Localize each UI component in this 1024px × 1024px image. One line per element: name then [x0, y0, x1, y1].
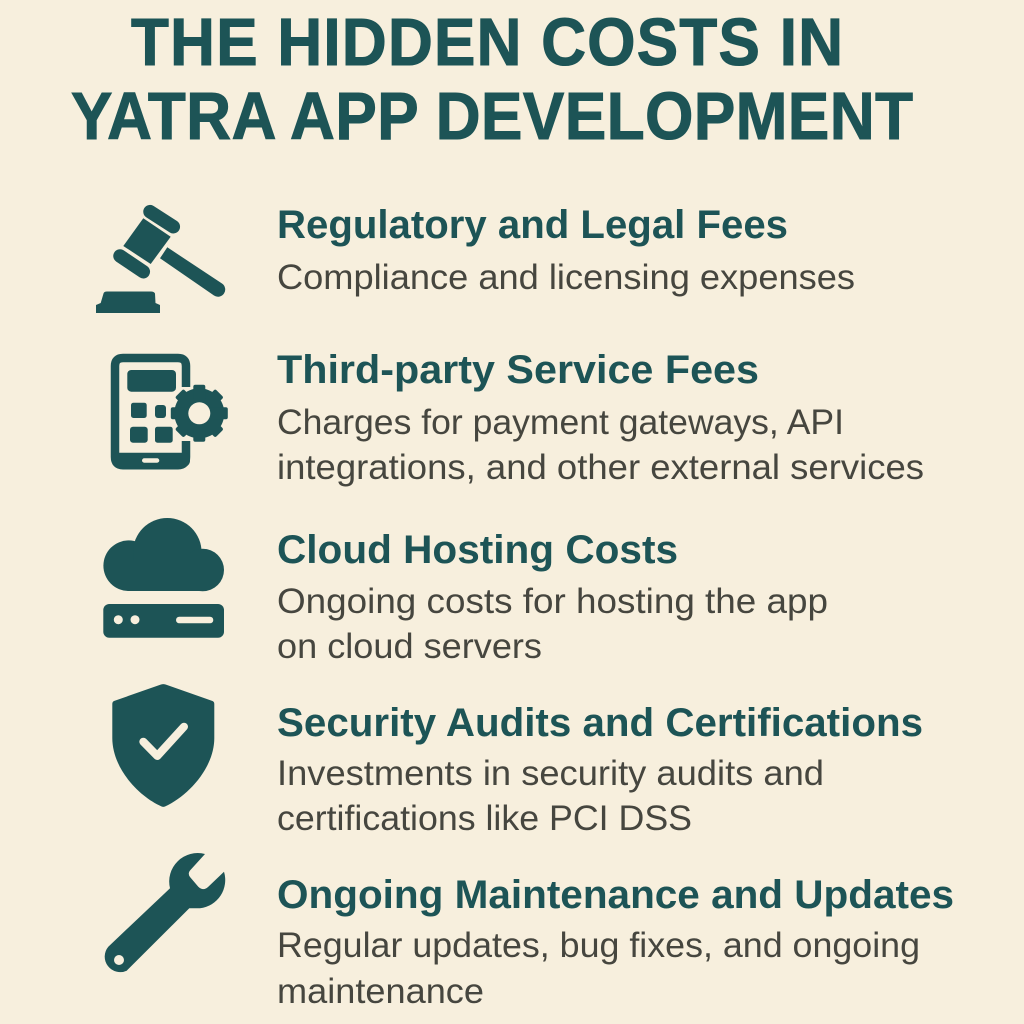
- description: certifications like PCI DSS: [277, 799, 692, 838]
- description: integrations, and other external services: [277, 448, 924, 487]
- description: Compliance and licensing expenses: [277, 258, 855, 297]
- icon: cloud and server: [103, 518, 224, 638]
- panel: third-party service fees: [112, 348, 924, 487]
- panel: ongoing maintenance and updates: [105, 853, 954, 1011]
- description: [277, 926, 920, 1011]
- heading: Third-party Service Fees: [277, 348, 759, 392]
- title: THE HIDDEN COSTS IN: [131, 5, 843, 80]
- description: Ongoing costs for hosting the app: [277, 582, 828, 621]
- icon: gavel: [96, 212, 225, 313]
- description: maintenance: [277, 972, 484, 1011]
- icon: phone calculator with gear: [112, 358, 228, 467]
- description: Investments in security audits and: [277, 754, 824, 793]
- title: YATRA APP DEVELOPMENT: [71, 79, 913, 154]
- heading: Ongoing Maintenance and Updates: [277, 873, 954, 917]
- heading: Cloud Hosting Costs: [277, 528, 678, 572]
- description: [277, 582, 828, 666]
- panel: cloud hosting costs: [103, 518, 828, 666]
- icon: wrench: [105, 853, 225, 972]
- description: [277, 754, 824, 838]
- panel: security audits and certifications: [112, 684, 923, 838]
- heading: Security Audits and Certifications: [277, 701, 923, 745]
- title: [71, 5, 913, 154]
- description: Charges for payment gateways, API: [277, 403, 844, 442]
- panel: regulatory and legal fees: [96, 203, 855, 313]
- description: on cloud servers: [277, 627, 542, 666]
- heading: Regulatory and Legal Fees: [277, 203, 788, 247]
- icon: shield with check: [112, 684, 214, 807]
- description: Regular updates, bug fixes, and ongoing: [277, 926, 920, 965]
- description: [277, 403, 924, 487]
